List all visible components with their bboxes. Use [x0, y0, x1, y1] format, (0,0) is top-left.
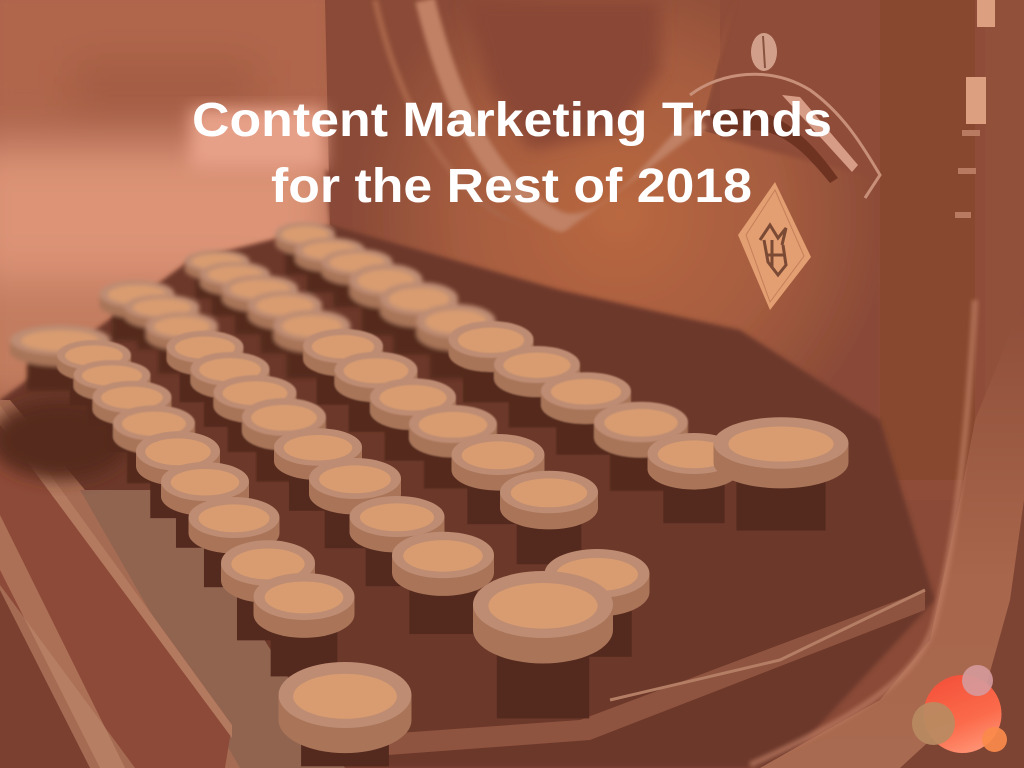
blurred background left: [0, 0, 360, 410]
ribbon arc: [425, 0, 700, 224]
typewriter keys: middle rows: [57, 321, 688, 491]
typewriter keys: rear rows: [10, 222, 496, 391]
icon: screw and curved lever: [690, 33, 880, 198]
title: for the Rest of 2018: [271, 160, 752, 213]
typewriter keys: front rows: [136, 417, 848, 766]
title: Content Marketing Trends: [192, 94, 832, 147]
typewriter body: [325, 0, 885, 500]
logo: overlapping circles: [912, 665, 1007, 753]
icon: diamond badge: [738, 182, 811, 310]
right frame: [720, 0, 1024, 500]
light strips on right edge: [977, 0, 995, 27]
bottom left bars: [0, 400, 285, 768]
title: [192, 94, 832, 213]
keyboard deck: [0, 225, 935, 768]
